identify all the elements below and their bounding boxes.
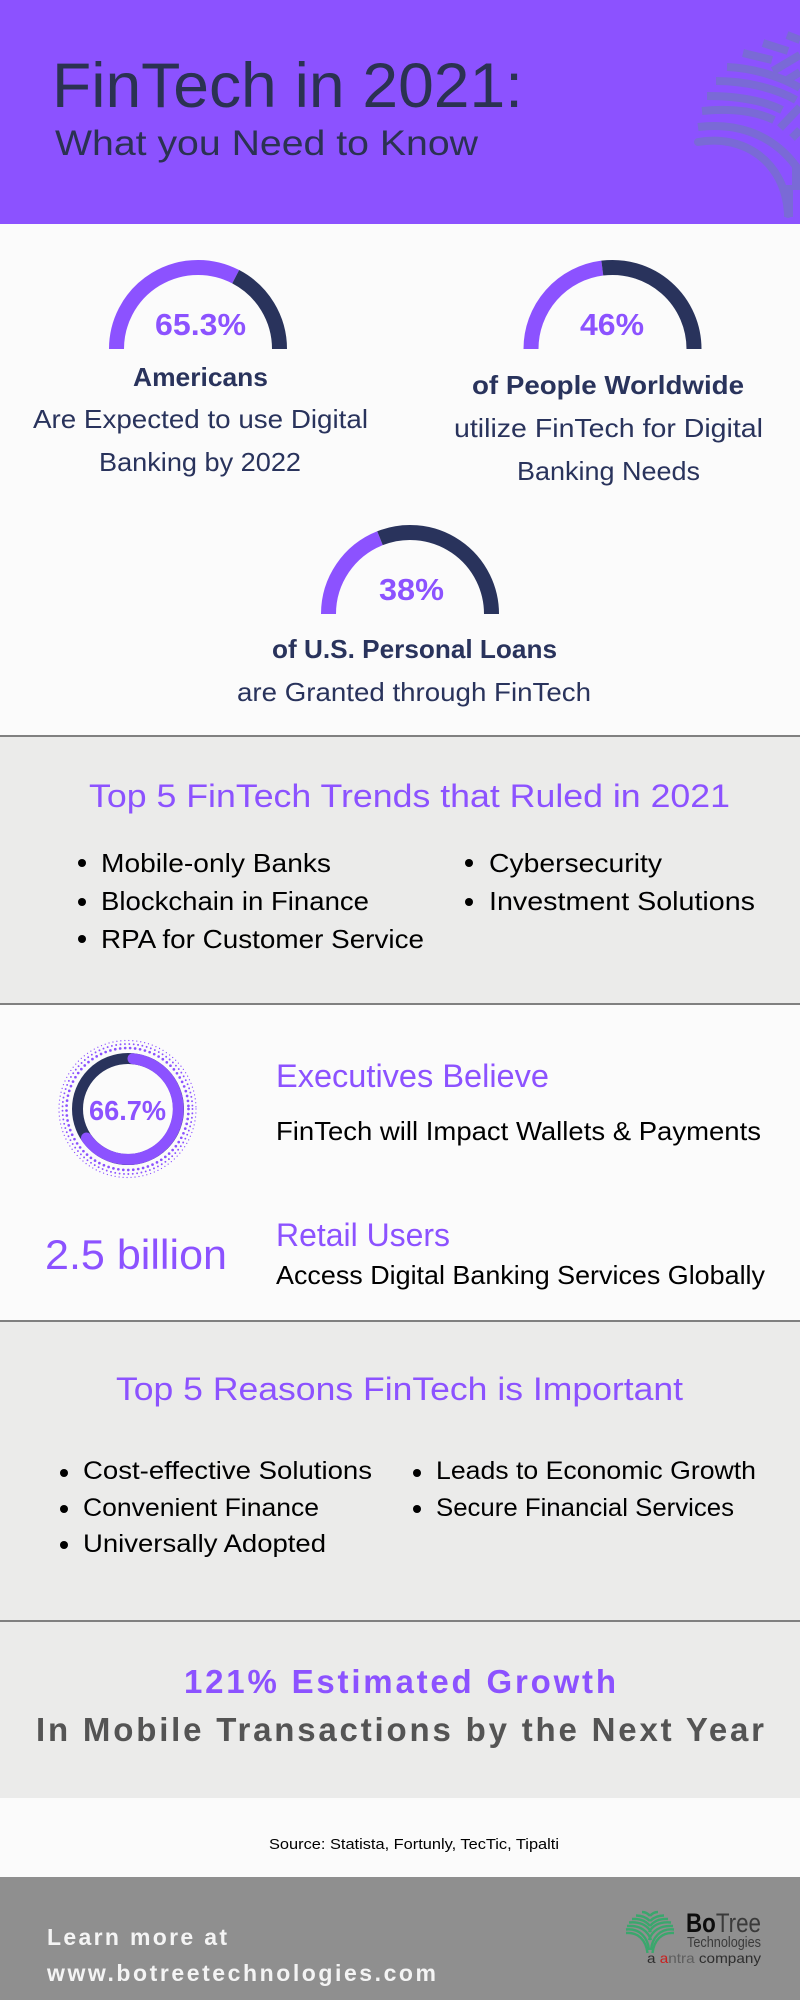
text block: executives believe — [276, 1058, 761, 1146]
list: trends left column — [78, 848, 424, 954]
text block: retail users: Retail Users — [276, 1217, 450, 1253]
value: 38%: 38% — [379, 572, 444, 607]
description: utilize FinTech for Digital — [454, 413, 763, 443]
wordmark: Technologies: Technologies — [687, 1934, 761, 1951]
icon: green tree — [626, 1912, 674, 1953]
text block: executives believe: Executives Believe — [276, 1058, 549, 1094]
gauge: 65.3% — [116, 267, 280, 349]
title: FinTech in 2021: — [52, 51, 523, 121]
list: reasons left column — [60, 1457, 372, 1558]
description — [33, 404, 368, 477]
list: reasons left column: Convenient Finance — [83, 1494, 319, 1522]
call to action — [46, 1924, 436, 1986]
panel: top 5 reasons — [0, 1322, 800, 1620]
list: trends right column — [465, 848, 755, 916]
label: Americans: Americans — [133, 362, 268, 392]
list: reasons right column: Secure Financial Services — [436, 1494, 734, 1522]
panel: estimated growth callout — [0, 1622, 800, 1798]
panel: worldwide gauge stat — [454, 267, 763, 486]
tagline: a antra company: a antra company — [647, 1950, 761, 1966]
heading: trends: Top 5 FinTech Trends that Ruled in 2021 — [89, 778, 730, 814]
description: Are Expected to use Digital — [33, 404, 368, 434]
panel: top 5 trends — [0, 737, 800, 1003]
text block: retail users — [276, 1217, 765, 1290]
value: 65.3%: 65.3% — [155, 307, 246, 342]
label: of People Worldwide: of People Worldwide — [472, 370, 744, 400]
gauge: 46% — [531, 267, 694, 349]
text block: retail users: Access Digital Banking Services Globally — [276, 1260, 765, 1290]
icon: decorative tree watermark — [698, 35, 800, 217]
call to action: www.botreetechnologies.com — [46, 1960, 436, 1986]
list: trends left column: Mobile-only Banks — [101, 848, 331, 878]
value: 46%: 46% — [580, 307, 644, 342]
callout: mobile transactions: In Mobile Transactions by the Next Year — [36, 1711, 764, 1748]
text block: executives believe: FinTech will Impact Wallets & Payments — [276, 1116, 761, 1146]
chart: 66.7% donut — [59, 1040, 196, 1178]
list: trends right column: Investment Solutions — [489, 886, 755, 916]
list: reasons left column: Cost-effective Solutions — [83, 1457, 372, 1485]
list: reasons left column: Universally Adopted — [83, 1530, 326, 1558]
description: are Granted through FinTech — [237, 677, 591, 707]
stat: 2.5 billion: 2.5 billion — [45, 1231, 227, 1278]
list: reasons right column — [413, 1457, 756, 1522]
list: trends right column: Cybersecurity — [489, 848, 662, 878]
description: Banking Needs — [517, 456, 700, 486]
description: Banking by 2022 — [99, 447, 301, 477]
panel: personal loans gauge stat — [237, 532, 591, 707]
wordmark: BoTree: BoTree — [686, 1908, 761, 1938]
logo: BoTree Technologies — [626, 1908, 761, 1966]
value: 66.7%: 66.7% — [89, 1095, 166, 1126]
gauge: 38% — [328, 532, 492, 614]
header banner — [0, 0, 800, 224]
list: trends left column: Blockchain in Finance — [101, 886, 369, 916]
list: reasons right column: Leads to Economic Growth — [436, 1457, 756, 1485]
call to action: Learn more at — [47, 1924, 227, 1950]
panel: Americans gauge stat — [33, 267, 368, 477]
callout: 121% growth: 121% Estimated Growth — [184, 1663, 616, 1700]
description — [454, 413, 763, 486]
subtitle: What you Need to Know — [55, 124, 479, 163]
list: trends left column: RPA for Customer Service — [101, 924, 424, 954]
panel: footer — [0, 1877, 800, 2000]
source note: Source: Statista, Fortunly, TecTic, Tipalti — [269, 1836, 559, 1853]
heading: reasons: Top 5 Reasons FinTech is Important — [116, 1371, 683, 1407]
label: of U.S. Personal Loans: of U.S. Personal Loans — [272, 634, 557, 664]
